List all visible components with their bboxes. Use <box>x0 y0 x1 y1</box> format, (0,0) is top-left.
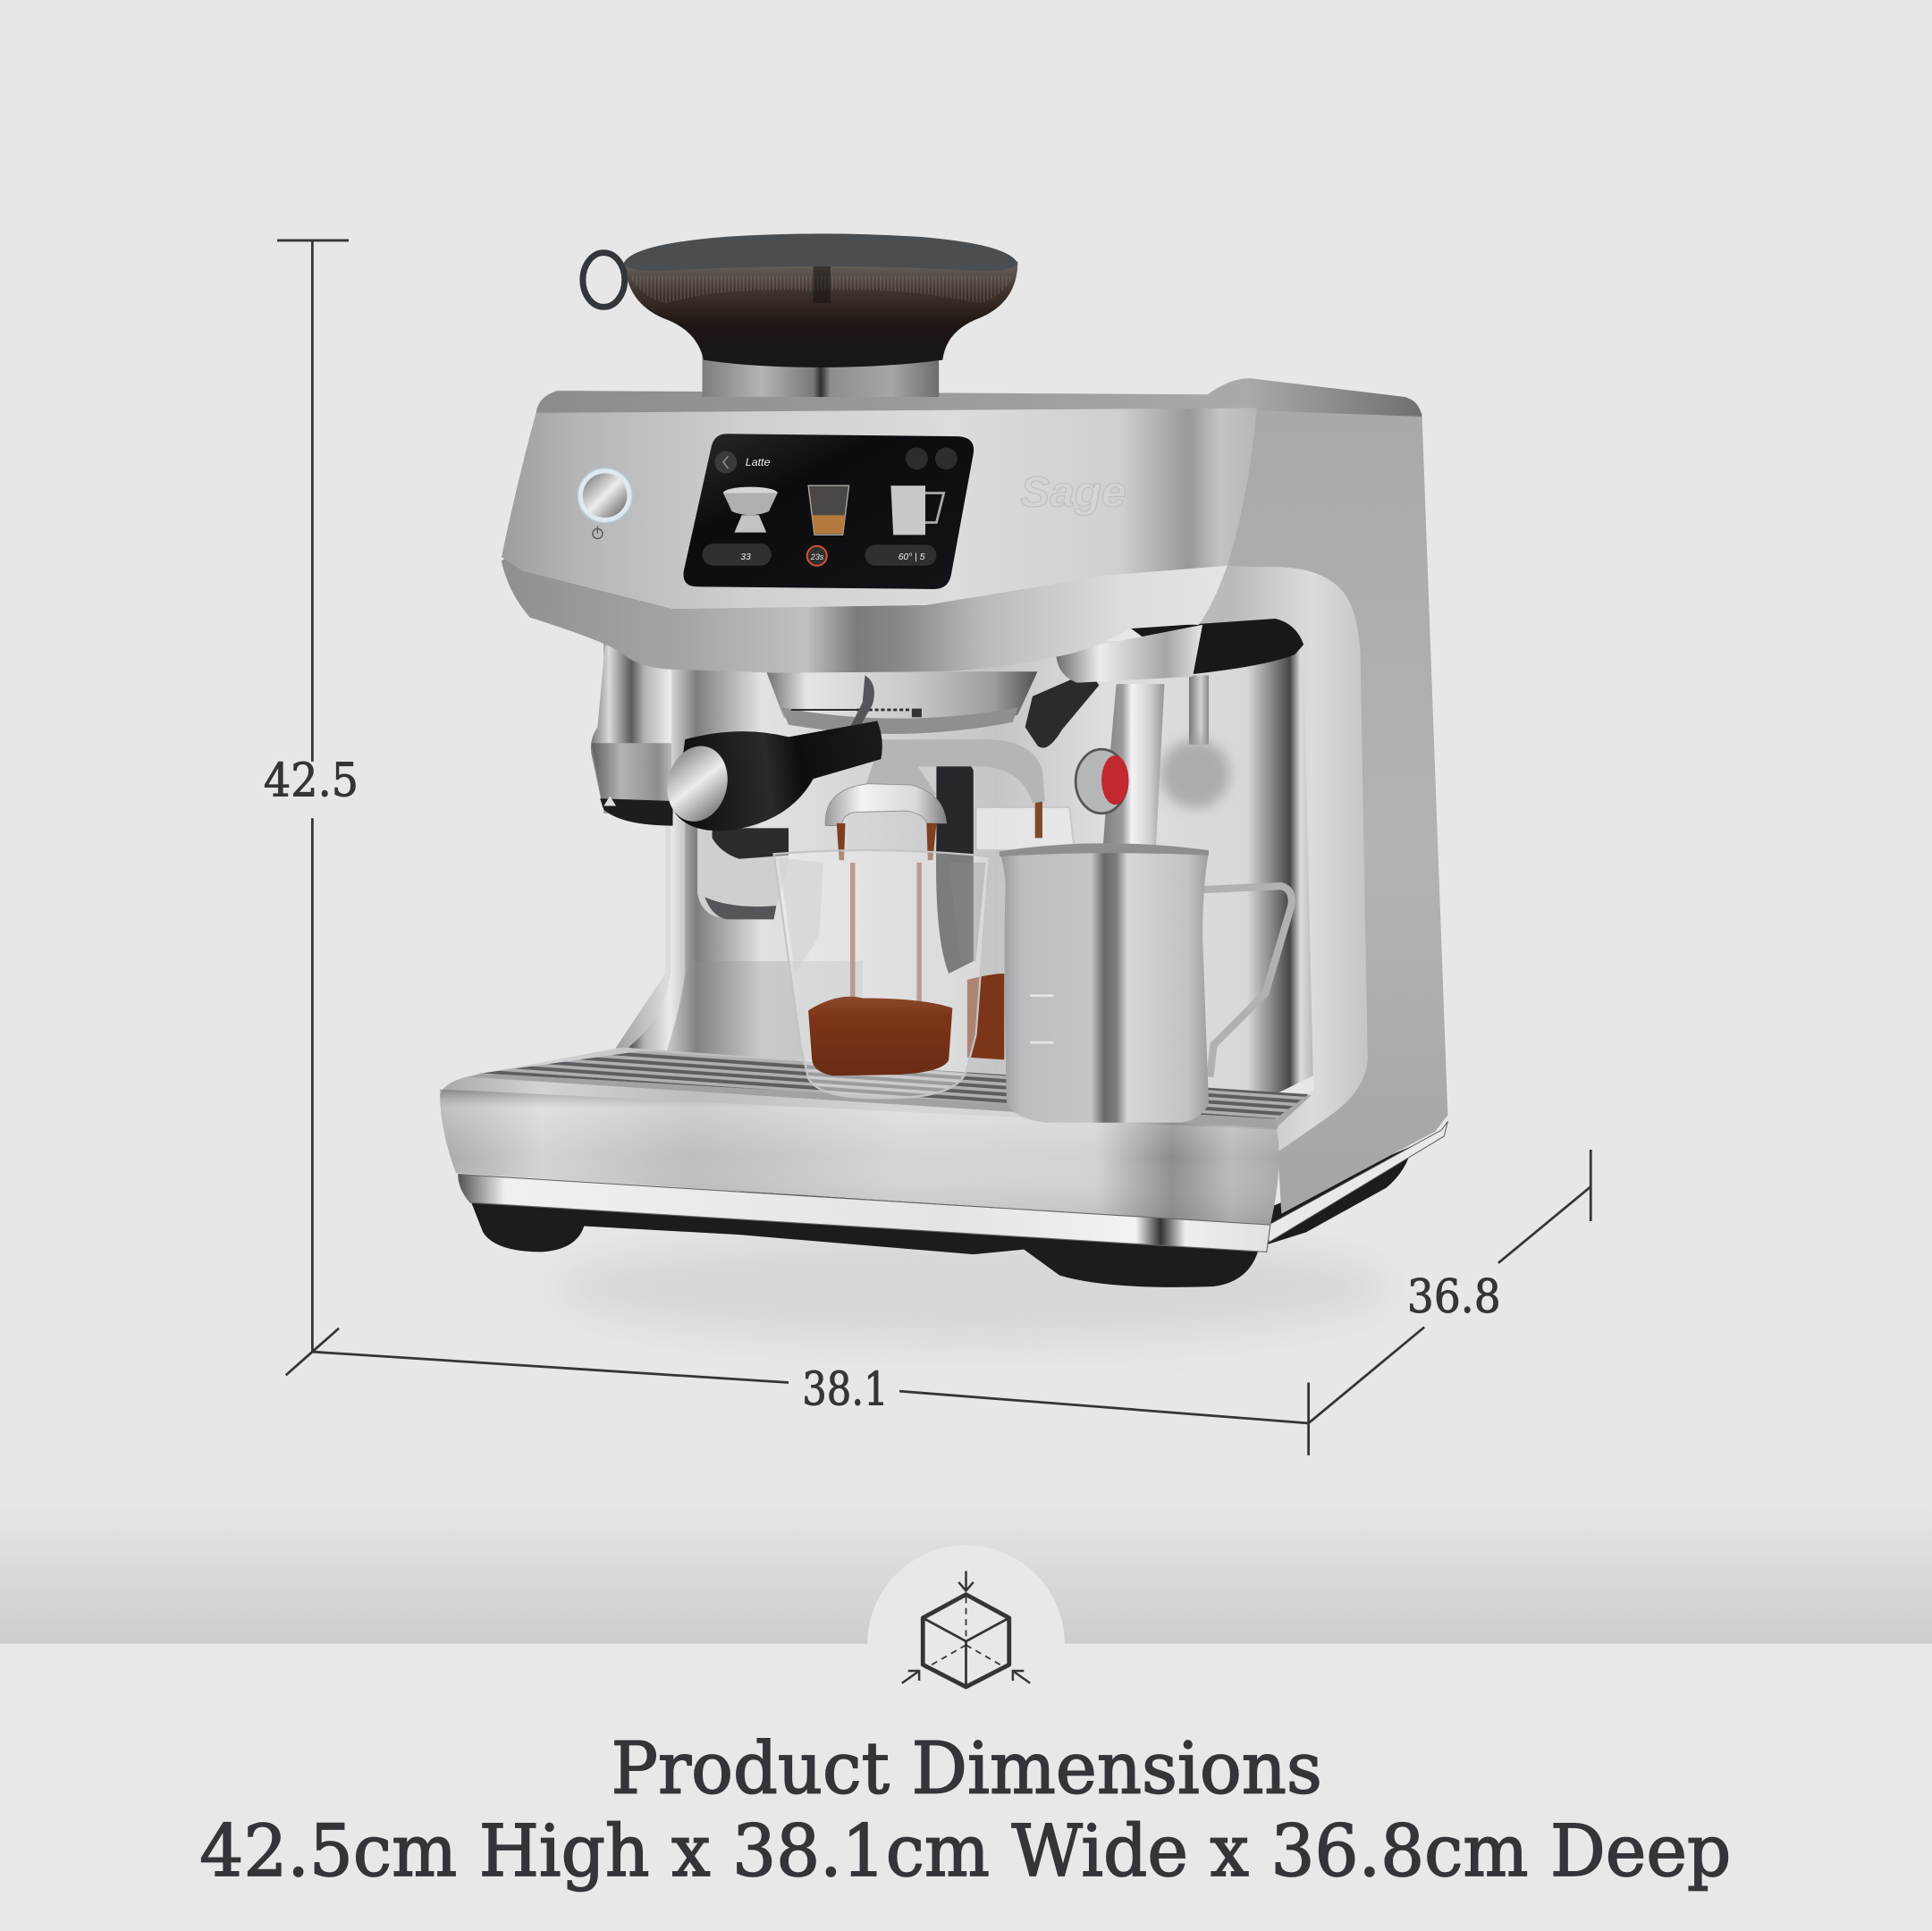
bean hopper neck <box>703 351 939 397</box>
inner tube <box>1189 675 1209 745</box>
coffee <box>808 997 952 1075</box>
screen top buttons <box>906 447 958 469</box>
heading: Product Dimensions <box>612 1726 1322 1809</box>
drain panel <box>936 748 974 974</box>
collar black base <box>600 798 672 826</box>
spout block <box>863 739 1045 804</box>
arrow: left <box>902 1671 919 1683</box>
dose level line <box>791 709 922 717</box>
steam knob <box>1076 749 1128 814</box>
jug min mark <box>1030 1041 1053 1043</box>
machine interior <box>603 641 1320 1115</box>
dimension: width 38.1: 38.1 <box>802 1363 889 1416</box>
milk pill: 60° | 5 <box>899 552 925 562</box>
tank reflection <box>704 898 776 919</box>
coffee machine <box>440 233 1447 1343</box>
icon: dimensions cube <box>902 1571 1030 1687</box>
interior lower shading <box>641 961 863 1059</box>
dimension: width 38.1 <box>286 1328 1309 1455</box>
jug handle <box>1200 886 1292 1077</box>
arrow: right <box>1013 1671 1030 1683</box>
steam blob <box>1160 739 1229 808</box>
hopper centre shade <box>814 266 831 303</box>
hopper ribs <box>631 276 1013 303</box>
head lower bevel <box>502 559 1228 673</box>
dimension: depth 36.8 <box>1309 1150 1590 1423</box>
feet <box>469 1146 1412 1287</box>
steam wand head <box>1056 625 1202 683</box>
portafilter spout <box>825 784 946 826</box>
column collar <box>592 743 671 823</box>
footer gradient band <box>0 1497 1932 1645</box>
glass <box>774 850 990 1098</box>
power symbol <box>593 527 603 538</box>
timer: 23s <box>810 552 824 561</box>
head top surface <box>536 378 1422 417</box>
base shading <box>440 1090 1279 1225</box>
steam wand <box>1102 684 1164 850</box>
back stream <box>1035 771 1042 838</box>
brand logo: Sage <box>1020 468 1126 517</box>
left column <box>591 645 685 1055</box>
side panel <box>1199 408 1447 1214</box>
arrow: top <box>958 1571 974 1590</box>
power button <box>578 468 632 538</box>
drip tray grate <box>480 1051 1309 1119</box>
footer panel <box>0 1644 1932 1931</box>
dimension: depth 36.8: 36.8 <box>1407 1271 1501 1324</box>
tamper lever <box>845 675 874 739</box>
screen glass icon <box>808 485 849 535</box>
espresso streams <box>837 823 936 1008</box>
jug top opening <box>1000 843 1209 856</box>
side lower chrome strip <box>1264 1121 1447 1242</box>
side arch face <box>1199 566 1368 1152</box>
handle cap <box>660 739 735 828</box>
bowl rim <box>781 707 1017 734</box>
hopper lid ring <box>583 253 625 307</box>
right lever <box>1025 671 1099 747</box>
head front face <box>502 408 1257 609</box>
milk jug <box>1000 843 1292 1123</box>
portafilter handle <box>660 721 882 831</box>
tray front lip <box>469 1074 1278 1129</box>
dimensions summary: 42.5cm High x 38.1cm Wide x 36.8cm Deep <box>199 1809 1731 1893</box>
screen portafilter icon <box>723 487 778 533</box>
screen jug icon <box>890 485 944 535</box>
chrome strip <box>459 1175 1270 1252</box>
jug max mark <box>1030 995 1053 997</box>
hopper lid <box>623 233 1017 271</box>
screen title: Latte <box>746 456 770 468</box>
back button <box>714 451 737 473</box>
base <box>440 1048 1311 1252</box>
jug body <box>1000 848 1209 1123</box>
icon backing tab <box>867 1545 1065 1645</box>
water tank window <box>697 828 789 918</box>
glass inner reflection <box>779 857 823 974</box>
dimension: height 42.5: 42.5 <box>264 755 359 807</box>
grind pill <box>703 544 772 566</box>
group head bowl <box>766 671 1037 728</box>
milk pill <box>865 544 936 566</box>
back coffee <box>967 974 1004 1059</box>
back glass <box>967 771 1075 1059</box>
drip bowl dark <box>713 828 789 859</box>
touch screen <box>684 434 974 589</box>
machine shadow <box>554 1232 1392 1343</box>
timer <box>807 546 827 566</box>
collar marker <box>603 796 616 806</box>
bean hopper bowl <box>625 261 1017 367</box>
glass reflection <box>949 863 986 961</box>
recess dark trim <box>1131 619 1303 674</box>
grind pill: 33 <box>740 552 751 562</box>
base front face <box>440 1048 1311 1225</box>
